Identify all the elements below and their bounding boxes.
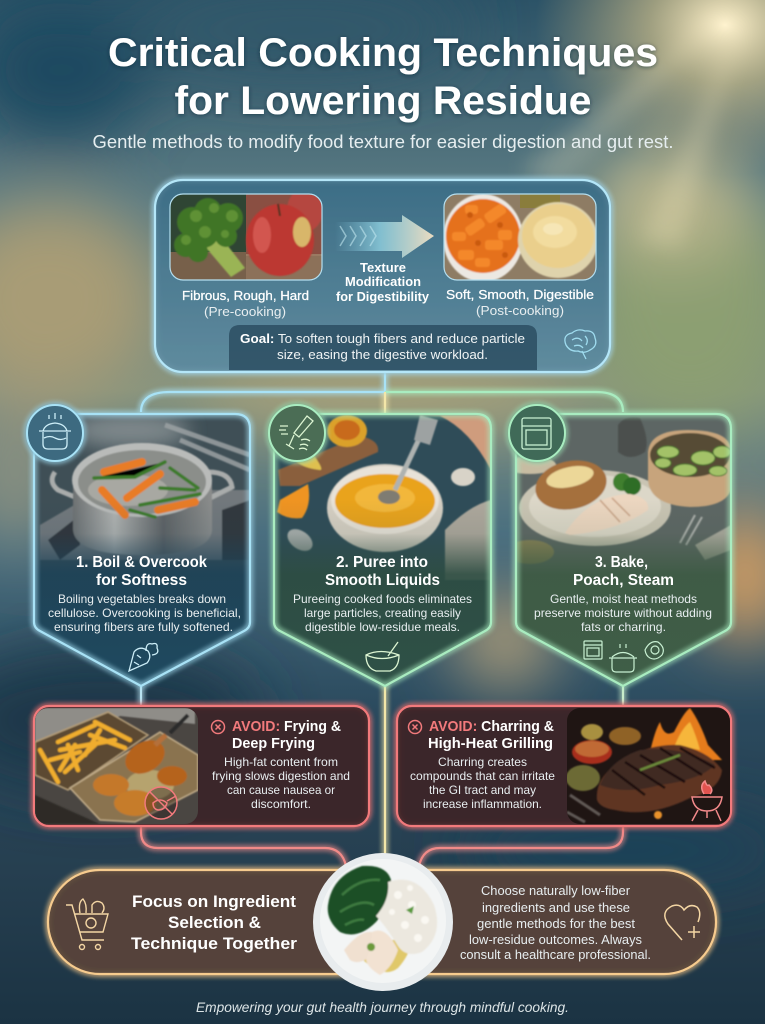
subtitle: Gentle methods to modify food texture for easier digestion and gut rest. — [92, 131, 674, 152]
body text: low-residue outcomes. Always — [469, 933, 642, 947]
heading: AVOID: Charring & — [429, 718, 554, 735]
heading: 3. Bake, — [595, 554, 648, 571]
label: pre-cooking: (Pre-cooking) — [204, 305, 286, 319]
body text — [410, 755, 555, 811]
body text: fats or charring. — [581, 620, 666, 634]
photo: mashed carrot and applesauce — [443, 194, 598, 282]
body text: ensuring fibers are fully softened. — [54, 620, 233, 634]
body text: Charring creates — [438, 755, 527, 769]
icon: brain — [565, 330, 596, 359]
photo: grilled steak — [566, 708, 730, 824]
body text: frying slows digestion and — [212, 769, 350, 783]
panel: texture modification — [155, 180, 610, 372]
body text: preserve moisture without adding — [534, 606, 712, 620]
title: for Lowering Residue — [174, 79, 592, 123]
panel: bake poach steam — [504, 405, 731, 686]
goal box — [229, 325, 537, 370]
body text: Boiling vegetables breaks down — [58, 592, 226, 606]
body text: cellulose. Overcooking is beneficial, — [48, 606, 241, 620]
icon: grill — [692, 781, 722, 821]
body text: Gentle, moist heat methods — [550, 592, 697, 606]
heading: Smooth Liquids — [325, 572, 440, 589]
label: post-cooking: Soft, Smooth, Digestible — [446, 288, 594, 302]
heading — [131, 892, 297, 953]
photo: deep fryer — [35, 708, 198, 824]
goal box: Goal: To soften tough fibers and reduce particle — [240, 331, 525, 346]
title: Critical Cooking Techniques — [108, 31, 658, 75]
body text — [48, 592, 241, 634]
body text: compounds that can irritate — [410, 769, 555, 783]
icons: oven, pot, egg — [584, 641, 663, 672]
body text: consult a healthcare professional. — [460, 948, 651, 962]
photo: baked potato, chicken, steamer — [517, 415, 730, 574]
heading — [573, 554, 674, 589]
body text: High-fat content from — [224, 755, 338, 769]
body text: large particles, creating easily — [304, 606, 461, 620]
arrow: texture transformation — [335, 215, 434, 258]
heading: High-Heat Grilling — [428, 735, 553, 752]
label: post-cooking — [446, 288, 594, 318]
body text: increase inflammation. — [423, 797, 542, 811]
body text: Choose naturally low-fiber — [481, 884, 630, 898]
heading: Deep Frying — [232, 735, 315, 752]
body text: the GI tract and may — [429, 783, 536, 797]
icon: heart plus — [665, 905, 700, 940]
body text: ingredients and use these — [482, 901, 630, 915]
label: texture modification: Texture — [360, 261, 406, 275]
label: pre-cooking: Fibrous, Rough, Hard — [182, 289, 309, 303]
label: texture modification — [336, 261, 429, 304]
heading — [76, 554, 207, 589]
heading — [325, 554, 440, 589]
body text: digestible low-residue meals. — [305, 620, 460, 634]
icon: bowl — [366, 642, 399, 671]
body text — [534, 592, 712, 634]
body text — [460, 884, 651, 962]
heading: 2. Puree into — [336, 554, 428, 571]
body text: Pureeing cooked foods eliminates — [293, 592, 472, 606]
heading: 1. Boil & Overcook — [76, 554, 207, 571]
label: post-cooking: (Post-cooking) — [476, 304, 564, 318]
panel: focus on ingredients — [48, 853, 716, 991]
heading: Poach, Steam — [573, 572, 674, 589]
icon: no frying — [145, 787, 177, 819]
body text: discomfort. — [251, 797, 311, 811]
heading: Technique Together — [131, 934, 297, 953]
goal box: size, easing the digestive workload. — [277, 347, 488, 362]
label: texture modification: for Digestibility — [336, 290, 429, 304]
panel: puree — [269, 405, 491, 686]
icon: carrot — [129, 644, 158, 671]
icon: grocery cart — [66, 899, 108, 950]
body text: can cause nausea or — [227, 783, 335, 797]
icon: oven — [509, 405, 565, 461]
heading — [212, 718, 341, 752]
body text: gentle methods for the best — [477, 917, 636, 931]
icon: immersion blender — [269, 405, 325, 461]
heading — [408, 718, 554, 752]
body text — [293, 592, 472, 634]
body text — [212, 755, 350, 811]
plate of food — [313, 853, 453, 991]
label: pre-cooking — [182, 289, 309, 319]
heading: AVOID: Frying & — [232, 718, 341, 735]
connector lines — [141, 372, 623, 870]
photo: boiling pot — [35, 415, 249, 568]
panel: avoid frying — [34, 706, 369, 826]
photo: broccoli and apple — [170, 188, 323, 280]
footer tagline: Empowering your gut health journey through mindful cooking. — [196, 1000, 569, 1015]
heading: Selection & — [168, 913, 261, 932]
heading: for Softness — [96, 572, 187, 589]
label: texture modification: Modification — [345, 275, 421, 289]
panel: avoid charring — [397, 706, 731, 826]
heading: Focus on Ingredient — [132, 892, 296, 911]
icon: cooking pot — [27, 405, 83, 461]
photo: pureed soup — [275, 415, 490, 640]
panel: boil and overcook — [27, 405, 250, 686]
title — [108, 31, 658, 123]
